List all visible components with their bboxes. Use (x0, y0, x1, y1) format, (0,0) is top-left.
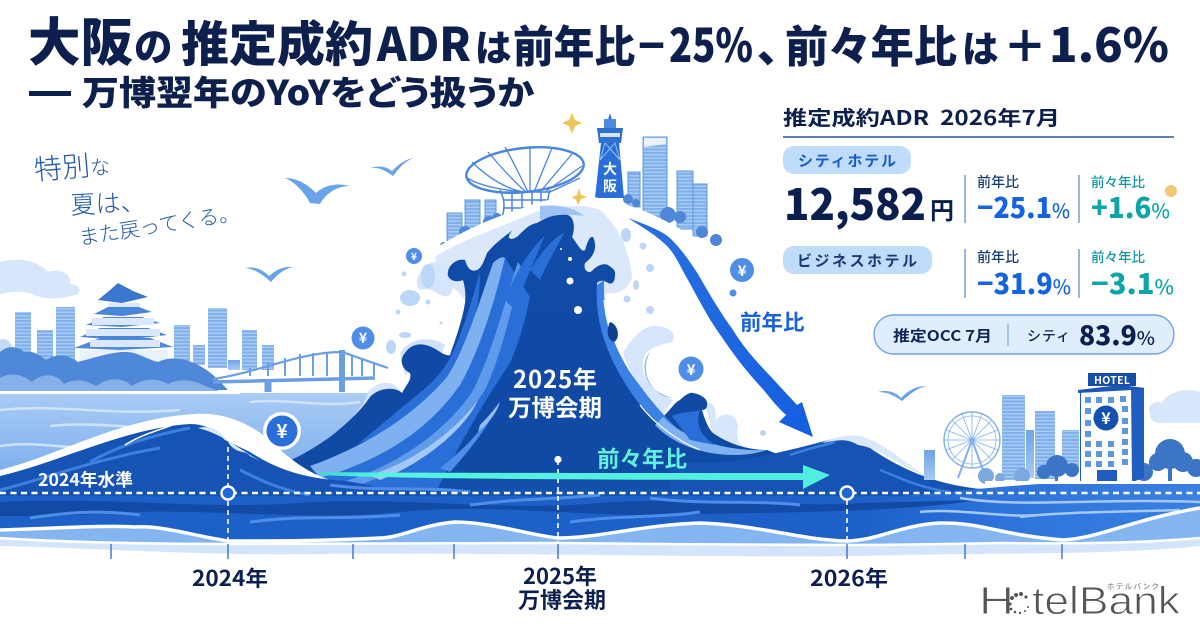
business two-year (1079, 246, 1174, 303)
spray dots (560, 248, 582, 314)
icon: yen coins: ¥ (276, 417, 288, 444)
icon: Osaka castle (74, 283, 173, 372)
flank streaks (300, 258, 530, 490)
icon: yen coins: ¥ (411, 248, 417, 263)
business YoY: −31.9% (977, 263, 1071, 303)
pill: city hotel (783, 146, 911, 174)
lower sea bands (0, 484, 1200, 556)
pill: city hotel: シティホテル (798, 150, 896, 171)
title: 、 (757, 11, 779, 75)
icon: bridge (213, 350, 388, 392)
icon: Tsutenkaku tower (595, 113, 624, 198)
handwritten tagline: また戻ってくる。 (76, 196, 241, 251)
icon: birds (245, 158, 927, 401)
icon: Tsutenkaku tower: 大 (603, 159, 617, 179)
label: 2024 level: 2024年水準 (38, 467, 133, 492)
handwritten tagline (32, 142, 241, 251)
icon: yen coins: ¥ (359, 328, 368, 348)
title: 前々年比 (785, 11, 957, 75)
city two-year: +1.6% (1091, 187, 1170, 227)
icon: yen coins: ¥ (687, 359, 696, 380)
logo: HotelBank: H (979, 580, 1014, 623)
icon: hotel building: HOTEL (1094, 373, 1130, 388)
axis label 2025: 2025年 (523, 560, 597, 591)
city ADR value: 円 (930, 191, 954, 226)
handwritten tagline: 夏は、 (70, 182, 146, 222)
subtitle: 万博翌年のYoYをどう扱うか (82, 66, 534, 115)
wave body (0, 215, 960, 530)
river background (0, 391, 400, 523)
arrow: two-year comparison (320, 465, 830, 489)
icon: yen coins (263, 248, 754, 450)
city two-year: 前々年比 (1091, 171, 1145, 191)
hilltop white (430, 197, 760, 450)
icon: small sparkle (572, 188, 587, 205)
icon: hotel building: ¥ (1101, 405, 1111, 429)
ring roof pavilion (464, 142, 586, 217)
axis label 2024: 2024年 (192, 562, 268, 593)
logo: HotelBank: ホテルバンク (1107, 581, 1159, 592)
city ADR value: 12,582 (784, 171, 926, 233)
panel: estimated ADR (783, 102, 1177, 354)
title: 1.6% (1049, 7, 1169, 76)
title: − (638, 11, 665, 75)
arrow: year-on-year drop (628, 218, 813, 437)
icon: Osaka tower and skyline on crest (440, 113, 722, 250)
2026 wave (780, 431, 1030, 530)
timeline: 2024 level dashed baseline (0, 447, 1200, 559)
business YoY: 前年比 (977, 247, 1019, 267)
icon: Tsutenkaku tower: 阪 (603, 176, 617, 196)
icon: ferris wheel (944, 412, 1000, 478)
title: ＋ (1003, 11, 1047, 75)
business two-year: −3.1% (1091, 263, 1174, 303)
logo: HotelBank: telBank (1032, 580, 1181, 623)
pill: OCC: 83.9% (1079, 316, 1155, 353)
label: year-on-year: 前年比 (740, 306, 805, 337)
city YoY (965, 172, 1070, 227)
business two-year: 前々年比 (1091, 246, 1145, 266)
label: expo period in wave: 万博会期 (508, 389, 602, 423)
pill: OCC (874, 315, 1174, 354)
2024 wave (0, 414, 340, 530)
label: 2025 in wave: 2025年 (513, 360, 597, 395)
axis label 2026: 2026年 (810, 562, 888, 593)
city two-year (1079, 171, 1177, 227)
title: 推定成約 (181, 5, 373, 75)
title: は (475, 18, 512, 72)
pill: business hotel (783, 246, 932, 274)
city YoY: −25.1% (977, 187, 1070, 227)
title: 大阪 (28, 1, 133, 76)
icon: sparkle (562, 113, 582, 134)
title: 25% (669, 10, 753, 76)
panel heading: 推定成約ADR 2026年7月 (783, 102, 1060, 131)
pill: OCC: シティ (1027, 326, 1070, 346)
title: の (134, 17, 172, 73)
handwritten tagline: 特別な (32, 142, 112, 189)
illustration: left Osaka castle skyline (0, 260, 388, 392)
right skyline with hotel (924, 373, 1200, 484)
spray behind main wave (346, 205, 766, 450)
axis label 2025: 万博会期 (518, 583, 606, 615)
pill: business hotel: ビジネスホテル (797, 250, 917, 271)
axis label 2025 (518, 560, 606, 615)
panel: main wave illustration (0, 197, 1030, 530)
city YoY: 前年比 (977, 172, 1019, 192)
title: 前年比 (513, 11, 635, 75)
icon: hotel building (1078, 373, 1145, 482)
logo: HotelBank (979, 580, 1181, 623)
title (28, 1, 1169, 76)
title: ADR (376, 9, 471, 75)
icon: yen coins: ¥ (738, 260, 747, 281)
title: は (962, 19, 999, 73)
label: two-year: 前々年比 (597, 442, 688, 474)
pill: OCC: 推定OCC 7月 (893, 325, 992, 346)
business YoY (965, 247, 1071, 303)
